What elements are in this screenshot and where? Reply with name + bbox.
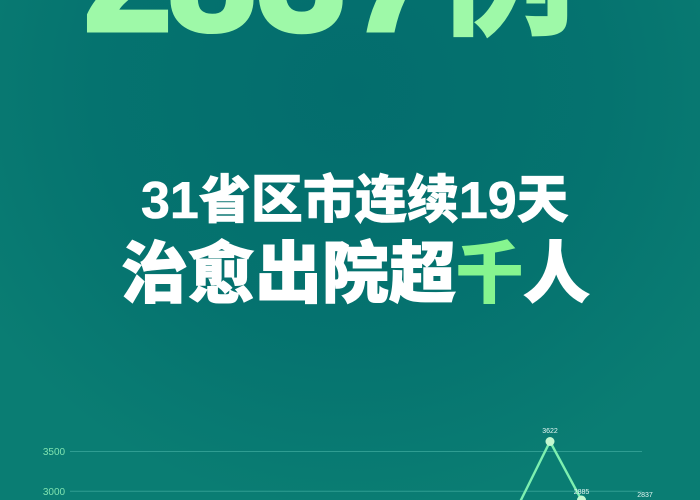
line chart: 3500: [43, 447, 66, 458]
line chart: [43, 428, 653, 500]
heading line 1: 31省区市连续19天: [141, 172, 569, 230]
line chart: 2885: [574, 489, 589, 496]
line chart: 2837: [637, 492, 653, 499]
headline number: 2837 cases, cropped at top: [84, 0, 573, 64]
heading line 2: 治愈出院超千人: [121, 237, 590, 312]
line chart: 3622: [542, 428, 558, 435]
line chart: 3000: [43, 487, 66, 498]
